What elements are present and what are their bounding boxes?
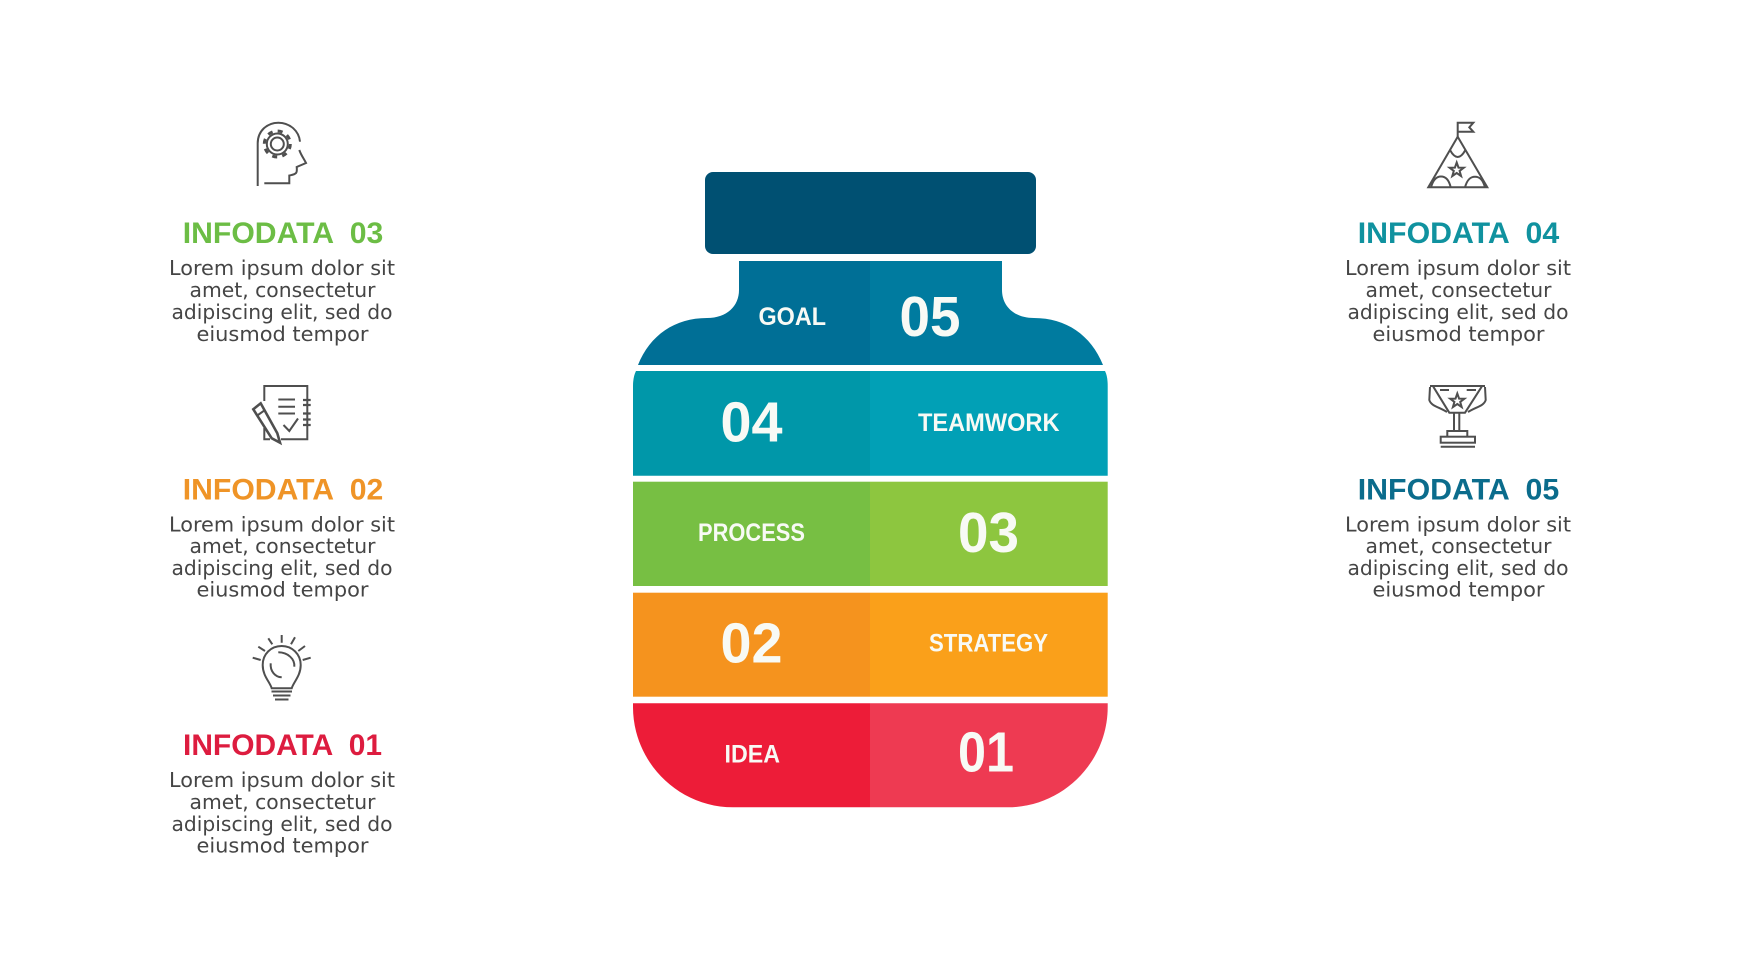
description: Lorem ipsum dolor sit [1345,256,1571,280]
icon: mountain with flag [1428,123,1487,187]
bottle cap [705,172,1036,254]
description: eiusmod tempor [1372,322,1545,346]
band 03: process: PROCESS [698,519,805,547]
band 01: idea: 01 [958,720,1014,784]
description: adipiscing elit, sed do [172,812,392,836]
band 05: goal [638,261,1103,365]
item: infodata 02 [169,386,395,602]
icon: document with pen [253,386,311,443]
description: amet, consectetur [190,534,376,558]
description: amet, consectetur [1366,534,1552,558]
band 02: strategy [633,593,1108,697]
description: eiusmod tempor [196,322,369,346]
description: amet, consectetur [190,790,376,814]
icon: head with gear [258,123,306,186]
item: infodata 05 [1345,386,1571,602]
heading: INFODATA 01 [183,729,382,762]
band 02: strategy: STRATEGY [929,630,1048,658]
icon: light bulb [253,635,311,700]
description: eiusmod tempor [196,578,369,602]
icon: trophy [1429,386,1486,447]
heading: INFODATA 02 [183,474,383,506]
band 03: process: 03 [958,501,1019,565]
description: Lorem ipsum dolor sit [169,256,395,280]
band 03: process [633,482,1108,586]
bottle diagram [633,172,1108,807]
heading: INFODATA 05 [1358,474,1559,506]
description: eiusmod tempor [1372,578,1545,602]
item: infodata 04 [1345,123,1571,346]
heading: INFODATA 03 [183,217,383,250]
description: Lorem ipsum dolor sit [1345,513,1571,537]
band 04: teamwork: 04 [720,390,783,454]
band 05: goal: 05 [900,285,960,349]
description: adipiscing elit, sed do [1348,556,1568,580]
description: adipiscing elit, sed do [172,556,392,580]
band 02: strategy: 02 [720,612,782,676]
band 04: teamwork [633,371,1108,476]
description: adipiscing elit, sed do [172,300,392,324]
band 04: teamwork: TEAMWORK [918,409,1060,437]
description: amet, consectetur [190,278,376,302]
band 01: idea [633,703,1108,807]
description: amet, consectetur [1366,278,1552,302]
band 05: goal: GOAL [758,303,826,331]
item: infodata 03 [169,123,395,346]
description: eiusmod tempor [196,834,369,858]
description: adipiscing elit, sed do [1348,300,1568,324]
band 01: idea: IDEA [724,740,780,768]
description: Lorem ipsum dolor sit [169,513,395,537]
item: infodata 01 [169,635,395,858]
description: Lorem ipsum dolor sit [169,768,395,792]
heading: INFODATA 04 [1358,217,1560,250]
